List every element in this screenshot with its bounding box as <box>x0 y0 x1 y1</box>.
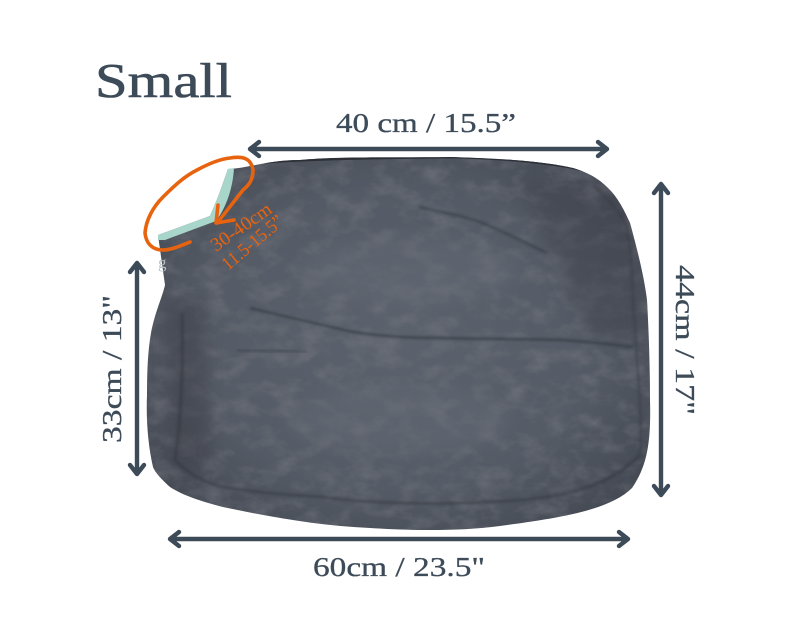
dimension: bottom width <box>170 532 628 582</box>
arrow: right height <box>654 184 668 495</box>
dimension: bottom width: 60cm / 23.5" <box>313 551 485 582</box>
fur texture <box>147 159 650 530</box>
callout: zip opening <box>145 157 288 275</box>
callout: zip opening: 11.5-15.5” <box>218 211 288 275</box>
label tag: g <box>158 253 167 272</box>
arrow: left height <box>130 263 144 474</box>
dimension: top width <box>250 107 607 156</box>
dimension: right height <box>654 184 701 495</box>
opening size label: 30-40cm <box>207 199 276 256</box>
orange loop with arrow <box>145 157 253 250</box>
dimension: right height: 44cm / 17" <box>670 265 701 415</box>
mint inner lining <box>158 168 234 240</box>
dimension: left height: 33cm / 13" <box>96 295 127 443</box>
arrow: top width <box>250 142 607 156</box>
arrow: bottom width <box>170 532 628 546</box>
dimension: left height <box>96 263 144 474</box>
cushion photo <box>146 157 650 530</box>
creases <box>250 308 633 347</box>
title: Small <box>95 53 232 108</box>
dimension: top width: 40 cm / 15.5” <box>336 107 516 138</box>
